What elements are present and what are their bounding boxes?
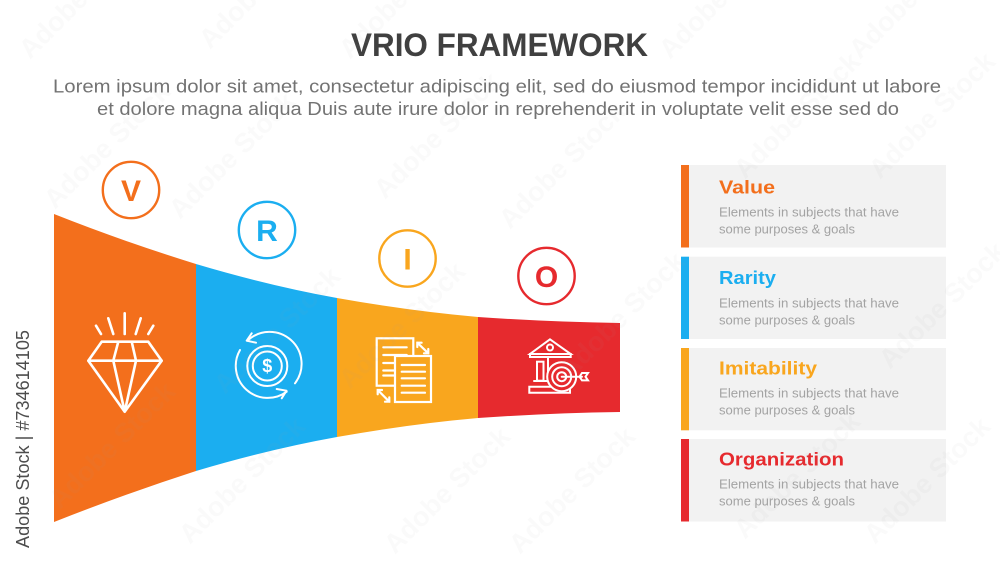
letter badge: O — [518, 248, 575, 304]
watermark: Adobe Stock — [858, 411, 997, 549]
funnel segment: rarity — [196, 264, 337, 471]
watermark: Adobe Stock — [38, 76, 177, 214]
description: value: Elements in subjects that have — [719, 204, 899, 220]
heading: organization: Organization — [719, 449, 844, 469]
description: rarity: some purposes & goals — [719, 312, 855, 327]
description: organization — [719, 477, 899, 509]
watermark: Adobe Stock — [333, 256, 472, 394]
letter badge: R: R — [256, 215, 278, 248]
watermark: Adobe Stock — [728, 406, 867, 544]
description: organization: some purposes & goals — [719, 494, 855, 509]
description: value: some purposes & goals — [719, 222, 855, 236]
watermark: Adobe Stock — [173, 411, 312, 549]
funnel chart — [54, 214, 620, 522]
heading: imitability: Imitability — [719, 359, 817, 379]
funnel segment: value — [54, 214, 196, 522]
watermark: Adobe Stock — [493, 96, 632, 234]
heading: value: Value — [719, 177, 775, 197]
title: VRIO FRAMEWORK — [351, 27, 648, 63]
letter badge: I — [379, 230, 436, 287]
funnel segment: imitability — [337, 298, 478, 437]
letter badge: O: O — [535, 261, 558, 294]
icon: bank with target — [529, 339, 588, 393]
funnel segment: organization — [478, 317, 620, 418]
icon: coin with circular arrows: $ — [262, 356, 272, 376]
watermark: Adobe Stock — [163, 86, 302, 224]
description: imitability: some purposes & goals — [719, 403, 855, 418]
icon: coin with circular arrows — [236, 332, 302, 398]
watermark: Adobe Stock — [503, 421, 642, 559]
description: rarity — [719, 295, 899, 327]
panel: organization — [681, 439, 946, 522]
letter badge: V — [103, 162, 159, 218]
subtitle text — [53, 76, 941, 119]
subtitle text: Lorem ipsum dolor sit amet, consectetur adipiscing elit, sed do eiusmod tempor incididunt ut labore — [53, 76, 941, 96]
watermark: Adobe Stock — [728, 46, 867, 184]
description: rarity: Elements in subjects that have — [719, 295, 899, 310]
panel: imitability — [681, 348, 946, 430]
description: imitability — [719, 386, 899, 418]
description: value — [719, 204, 899, 236]
heading: rarity: Rarity — [719, 268, 776, 288]
panel: rarity — [681, 257, 946, 339]
panel: value — [681, 165, 946, 248]
icon: documents with arrows — [377, 338, 431, 402]
watermark: Adobe Stock — [553, 246, 692, 384]
stock credit: Adobe Stock | #734614105 — [12, 330, 33, 548]
letter badge: R — [239, 202, 295, 258]
watermark: Adobe Stock — [863, 46, 1000, 184]
icon: diamond — [88, 313, 162, 412]
watermark: Adobe Stock — [208, 261, 347, 399]
letter badge: V: V — [121, 175, 141, 208]
subtitle text: et dolore magna aliqua Duis aute irure dolor in reprehenderit in voluptate velit esse sed do — [97, 99, 899, 119]
watermark: Adobe Stock — [378, 421, 517, 559]
description: imitability: Elements in subjects that have — [719, 386, 899, 401]
watermark: Adobe Stock — [368, 66, 507, 204]
watermark: Adobe Stock — [43, 376, 182, 514]
letter badge: I: I — [403, 244, 412, 276]
description: organization: Elements in subjects that have — [719, 477, 899, 492]
